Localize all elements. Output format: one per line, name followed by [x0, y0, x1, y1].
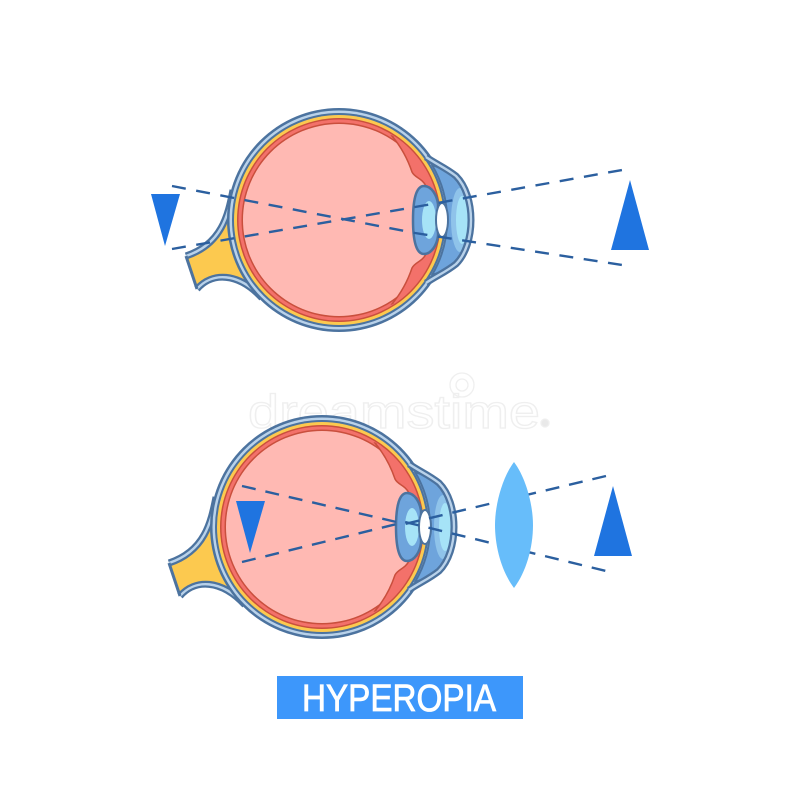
optic nerve [169, 497, 263, 605]
watermark: dreamstime [248, 385, 540, 438]
ciliary body [390, 135, 435, 305]
corrective convex lens [495, 462, 533, 588]
inverted image on retina [236, 501, 265, 553]
eyeball wall layers [210, 415, 434, 639]
pupil [436, 203, 448, 237]
inverted image behind retina [151, 194, 180, 246]
light rays: uncorrected [172, 170, 622, 265]
eye: corrected with lens [169, 415, 454, 639]
crystalline lens [413, 186, 438, 254]
object triangle: uncorrected [611, 180, 649, 250]
optic nerve [186, 190, 280, 298]
title banner: HYPEROPIA [302, 678, 497, 720]
watermark [248, 373, 549, 438]
pupil [419, 510, 431, 544]
eye: uncorrected hyperopia [186, 108, 471, 332]
cornea and anterior chamber [409, 464, 454, 590]
ciliary body [374, 442, 418, 612]
eyeball wall layers [227, 108, 451, 332]
light rays: corrected [242, 476, 606, 571]
cornea and anterior chamber [426, 157, 471, 283]
crystalline lens [396, 493, 421, 561]
object triangle: corrected [594, 486, 632, 556]
